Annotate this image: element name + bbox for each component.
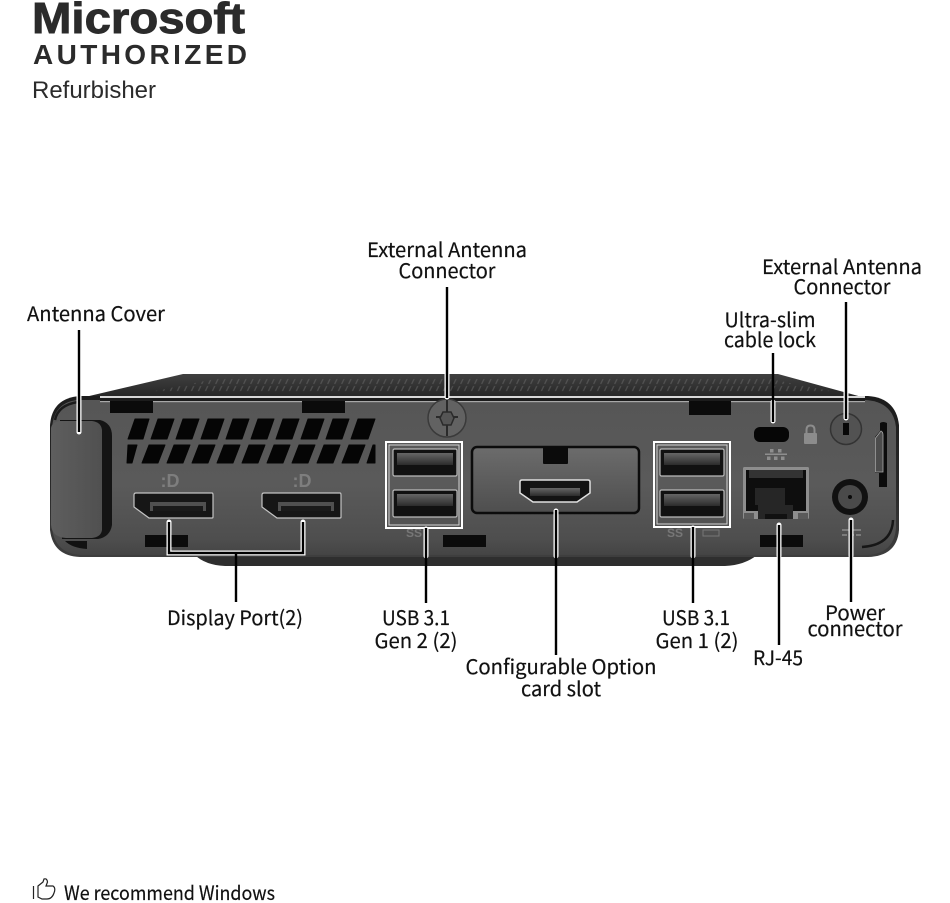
leader line: RJ-45 bbox=[776, 525, 782, 645]
leader line: option card bbox=[554, 510, 558, 655]
label: configurable option card slot: Configurable Option bbox=[466, 651, 656, 680]
label: USB 3.1 gen 1 bbox=[656, 602, 738, 654]
label: antenna cover: Antenna Cover bbox=[27, 298, 165, 327]
label: external antenna connector center bbox=[367, 234, 527, 284]
leader line: USB gen 2 bbox=[424, 528, 428, 603]
side latch bbox=[875, 422, 887, 487]
SS marks bbox=[406, 526, 719, 540]
top grille surface bbox=[85, 374, 862, 397]
label: USB 3.1 gen 2 bbox=[374, 602, 458, 654]
chassis back panel bbox=[50, 396, 899, 557]
DisplayPort symbols bbox=[160, 471, 312, 491]
icon: thumbs up bbox=[34, 879, 55, 899]
DisplayPort port 1 bbox=[134, 493, 213, 518]
label: power connector: connector bbox=[808, 613, 903, 642]
option card slot with HDMI bbox=[472, 447, 639, 513]
right antenna connector bbox=[830, 414, 862, 444]
ventilation grid bbox=[127, 419, 375, 463]
leader line: external antenna right bbox=[844, 302, 848, 419]
cable lock slot and lock icon bbox=[754, 426, 817, 444]
label: external antenna connector right: Connector bbox=[794, 271, 891, 300]
leader line: USB gen 1 bbox=[690, 527, 696, 603]
footer: we recommend Windows bbox=[34, 877, 275, 903]
label: RJ-45: RJ-45 bbox=[753, 642, 803, 671]
leader line: antenna cover bbox=[76, 330, 82, 432]
power connector bbox=[832, 479, 868, 535]
label: ultra-slim cable lock: cable lock bbox=[724, 324, 816, 353]
label: USB 3.1 gen 2: USB 3.1 bbox=[382, 602, 450, 631]
label: external antenna connector right: External Antenna bbox=[762, 251, 922, 280]
DisplayPort symbols: :D bbox=[160, 471, 180, 491]
leader line: external antenna center bbox=[444, 287, 450, 398]
text: Refurbisher: Refurbisher bbox=[32, 77, 156, 104]
network symbol bbox=[765, 449, 787, 460]
mini PC rear view bbox=[50, 374, 899, 566]
RJ-45 port bbox=[743, 467, 809, 519]
USB group right bbox=[654, 442, 730, 527]
leader line: cable lock bbox=[770, 353, 776, 422]
label: USB 3.1 gen 1: USB 3.1 bbox=[662, 602, 730, 631]
label: USB 3.1 gen 2: Gen 2 (2) bbox=[374, 625, 458, 654]
label: configurable option card slot bbox=[466, 651, 656, 702]
DisplayPort port 2 bbox=[262, 493, 341, 518]
label: ultra-slim cable lock: Ultra-slim bbox=[724, 304, 816, 333]
screw bbox=[428, 399, 466, 437]
DisplayPort symbols: :D bbox=[292, 471, 312, 491]
leader line: power bbox=[848, 520, 854, 602]
SS marks: SS bbox=[406, 526, 422, 540]
leader bracket: display port bbox=[169, 522, 303, 602]
mounting slots bbox=[110, 401, 803, 547]
SS marks: SS bbox=[667, 526, 683, 540]
label: external antenna connector center: Connector bbox=[398, 255, 496, 284]
antenna cover bbox=[51, 420, 112, 549]
label: external antenna connector center: External Antenna bbox=[367, 234, 527, 263]
label: power connector bbox=[808, 597, 903, 642]
USB group left bbox=[386, 442, 462, 528]
heading: Authorized: AUTHORIZED bbox=[33, 39, 247, 70]
label: external antenna connector right bbox=[762, 251, 922, 300]
label: USB 3.1 gen 1: Gen 1 (2) bbox=[656, 625, 738, 654]
label: display port: Display Port(2) bbox=[167, 602, 303, 631]
label: power connector: Power bbox=[825, 597, 885, 626]
foot under chassis bbox=[195, 555, 757, 566]
logo: Microsoft Authorized Refurbisher bbox=[32, 0, 247, 104]
label: ultra-slim cable lock bbox=[724, 304, 816, 353]
label: configurable option card slot: card slot bbox=[521, 673, 601, 702]
